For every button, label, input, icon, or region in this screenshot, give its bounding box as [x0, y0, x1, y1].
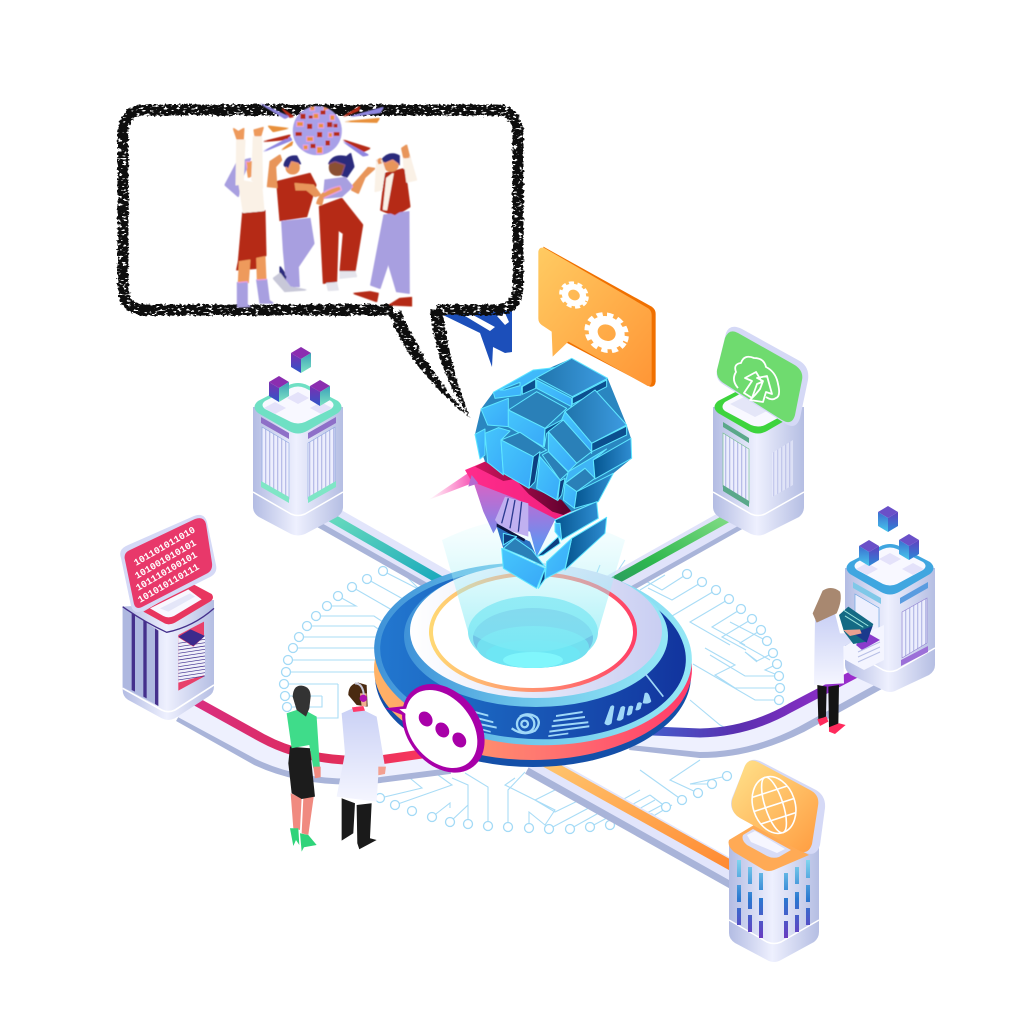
person: woman in green top	[287, 686, 321, 852]
isometric AI platform illustration	[116, 102, 935, 962]
screen: binary data: 101110100101	[134, 549, 200, 594]
platform base side	[375, 585, 691, 767]
second-row blocks	[481, 398, 508, 427]
bubble tail	[388, 310, 470, 418]
head backing	[475, 358, 632, 518]
right-side blocks	[565, 449, 607, 483]
building: bottom-right orange office	[729, 825, 819, 962]
speech bubble with dancers	[123, 103, 518, 418]
lower blocks	[555, 502, 598, 540]
crown block	[537, 358, 608, 397]
dancers illustration	[225, 103, 417, 307]
third-row blocks	[475, 429, 485, 459]
pipe: top-right green	[610, 510, 745, 592]
platform outer edge	[369, 555, 697, 753]
building: top-left teal server	[253, 383, 343, 536]
pipe: left red	[180, 697, 450, 777]
platform gradient ring	[431, 574, 635, 690]
building: left red data server	[123, 583, 214, 720]
pipe: bottom-right orange	[530, 758, 737, 880]
bubble interior	[123, 110, 518, 418]
dancer 4: red vest	[353, 145, 417, 306]
AI head made of blue blocks	[428, 358, 632, 588]
dancer 3: red trousers	[317, 153, 375, 291]
screen: binary data: 101101011010	[132, 524, 198, 569]
screen: globe	[731, 760, 825, 854]
cube: top-left stack	[269, 347, 330, 406]
pipe: top-left teal	[318, 510, 454, 592]
circuit terminals	[280, 566, 784, 834]
screen: gears speech bubble	[538, 247, 656, 387]
person: woman scientist at terminal	[813, 588, 873, 734]
bubble rough outline	[123, 110, 518, 310]
screen: binary data	[120, 515, 216, 612]
terminal drawer	[842, 625, 884, 670]
dancer 1: skirt	[225, 127, 273, 307]
screen: binary data: 101010110111	[136, 561, 202, 606]
platform navy ring	[376, 561, 690, 747]
screen: cloud sync	[717, 327, 808, 426]
circuit board background	[284, 560, 780, 829]
cube: right stack	[859, 506, 919, 566]
funnel	[468, 596, 598, 668]
building: top-right green server	[713, 383, 804, 536]
person: man in white coat with headset	[337, 683, 386, 849]
blue fragment behind the speech bubble	[443, 310, 512, 367]
chat bubble icon	[385, 668, 502, 789]
pink scan beam	[428, 462, 485, 500]
pipe: right purple	[630, 666, 878, 750]
platform lavender disc	[410, 564, 662, 698]
screen: binary data: 101001010101	[133, 537, 199, 582]
building: right blue server	[845, 544, 935, 692]
open mouth	[465, 462, 571, 557]
dancer 2: red tee	[267, 155, 321, 292]
hologram beam	[442, 518, 625, 652]
disco ball	[260, 103, 383, 156]
platform light inner band	[404, 565, 668, 707]
platform console icons	[473, 673, 663, 737]
central platform	[369, 518, 697, 767]
platform coloured rim	[374, 578, 692, 760]
top-left small block	[493, 368, 555, 398]
icon: spiral	[512, 714, 539, 733]
